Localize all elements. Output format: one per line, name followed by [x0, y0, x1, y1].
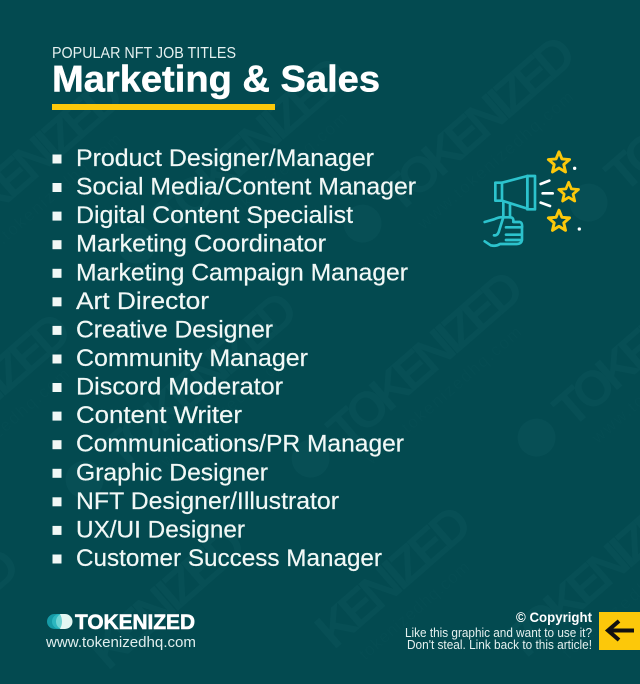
list item 8: Community Manager	[76, 345, 308, 372]
copyright note	[405, 609, 592, 652]
logo wordmark: TOKENIZED	[75, 611, 195, 634]
list item 2: Social Media/Content Manager	[76, 174, 416, 201]
list item 12: Graphic Designer	[76, 459, 268, 486]
text: TOKENIZED	[368, 24, 586, 224]
panel: job title list	[52, 145, 416, 572]
text: KENIZED	[304, 494, 482, 659]
list item 11: Communications/PR Manager	[76, 431, 404, 458]
list item 7: Creative Designer	[76, 316, 273, 343]
icon: megaphone	[485, 176, 535, 246]
list item 10: Content Writer	[76, 402, 242, 429]
text: tokenizedhq.com	[355, 557, 473, 664]
list item 5: Marketing Campaign Manager	[76, 259, 408, 286]
eyebrow text: POPULAR NFT JOB TITLES	[52, 45, 236, 62]
text: TOKENIZED	[142, 45, 360, 245]
list item 3: Digital Content Specialist	[76, 202, 353, 229]
list item 14: UX/UI Designer	[76, 516, 245, 543]
logo mark	[47, 614, 72, 629]
text: KENIZED	[78, 515, 256, 680]
title underline	[52, 104, 275, 110]
list item 15: Customer Success Manager	[76, 545, 382, 572]
list item 13: NFT Designer/Illustrator	[76, 488, 339, 515]
text: TOKENIZED	[316, 259, 534, 459]
heading block	[52, 45, 380, 110]
icon: stars	[548, 152, 579, 230]
copyright line 1: Like this graphic and want to use it?	[405, 626, 592, 640]
icon: dots	[573, 167, 581, 231]
list item 6: Art Director	[76, 288, 209, 315]
copyright heading: © Copyright	[516, 609, 592, 625]
list item 4: Marketing Coordinator	[76, 231, 326, 258]
icon: sound lines	[541, 181, 553, 206]
back arrow button	[599, 612, 640, 650]
list item 9: Discord Moderator	[76, 374, 283, 401]
title: Marketing & Sales	[52, 58, 380, 100]
text: TOKENIZED	[90, 280, 308, 480]
list item 1: Product Designer/Manager	[76, 145, 374, 172]
copyright line 2: Don't steal. Link back to this article!	[407, 638, 592, 652]
icon: megaphone with hand and stars	[485, 152, 581, 246]
text: www.tokenizedhq.com	[413, 87, 577, 234]
text: www.tokenizedhq.com	[187, 108, 351, 255]
text: www.tokenizedhq.com	[135, 343, 299, 490]
text: www.tokenizedhq.com	[361, 322, 525, 469]
icon: left arrow	[608, 621, 634, 640]
website url: www.tokenizedhq.com	[45, 634, 196, 651]
logo	[45, 611, 196, 651]
